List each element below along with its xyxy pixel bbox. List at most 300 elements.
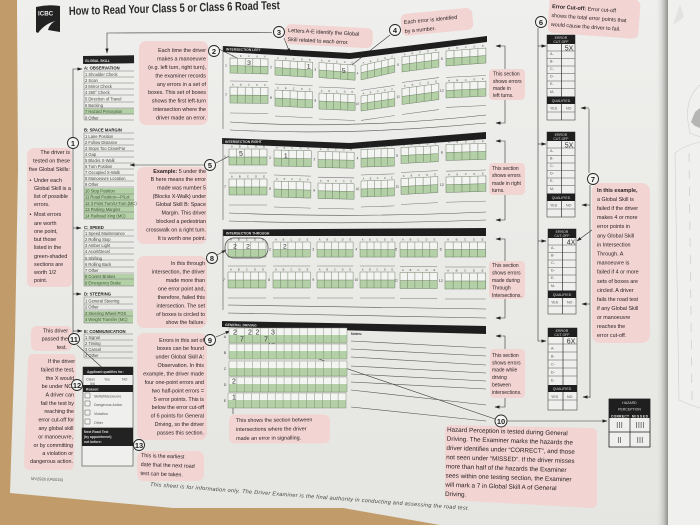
panel: error cut-off form left turns: M-: [550, 90, 555, 94]
callout 7: global skill failure: error points in: [597, 224, 630, 230]
callout: signalling section: intersections where the driver: [236, 426, 307, 433]
callout 7: global skill failure: fails the road test: [597, 297, 639, 303]
panel: error cut-off form general driving: A-: [551, 346, 555, 350]
error box row 1: 6: [441, 151, 443, 155]
side note: left turns: left turns.: [493, 93, 514, 99]
section E communication: 3 Cancel: [85, 347, 101, 352]
side note: through intersections: This section: [492, 263, 519, 269]
callout 7: global skill failure: in Intersection: [597, 242, 631, 248]
callout 2: set of boxes: any errors in a set of: [157, 82, 206, 88]
error box row 1: A B C D E: [403, 141, 437, 147]
callout 13: next test date: date that the next road: [141, 462, 195, 470]
panel: error cut-off form general driving: CUT-OFF: [554, 333, 570, 337]
connector lines and arrows: [73, 28, 607, 452]
callout 1: global skills: Global Skill is a: [34, 186, 71, 192]
error box row 2: A B C D E: [447, 269, 484, 272]
error box row 1: A B C D E: [277, 57, 311, 62]
callout 1: global skills: [27, 148, 72, 287]
number badges: [68, 16, 598, 450]
callout 7: global skill failure: Through. A: [597, 252, 624, 258]
number badges: 7: [591, 175, 595, 184]
callout 5: example: It is worth one point.: [158, 236, 206, 242]
callout 1: global skills: one point,: [34, 229, 58, 235]
callout 10: hazard perception: will mark a 7 in Global Skill A of General: [444, 482, 557, 492]
error box row 2: A B C D E: [230, 268, 264, 272]
section B space margin: B: SPACE MARGIN: [84, 128, 122, 132]
side note: through intersections: Intersections.: [492, 293, 522, 299]
callout 8: failed intersection: made more than: [166, 278, 205, 284]
callout 5: example: blocked a pedestrian: [156, 219, 206, 225]
section D steering: D: STEERING: [84, 292, 111, 296]
callout 1: global skills: The driver is: [40, 150, 70, 156]
callout: signalling section: This shows the section between: [236, 417, 312, 424]
error box row 1: 2: [233, 244, 237, 251]
panel: error cut-off form right turns: E-: [550, 179, 554, 183]
section B space margin: 9 Other: [85, 182, 99, 187]
section B space margin: 3 Stops Too Close/Far: [85, 146, 126, 151]
section E communication: [84, 329, 133, 358]
error box row 2: A B C D E: [277, 86, 311, 91]
callout 9: skill A errors: Errors in this set of: [159, 338, 205, 344]
callout 9: skill A errors: Observation. In this: [158, 363, 204, 369]
callout 11: passed: [31, 326, 72, 351]
number badges: 5: [208, 161, 212, 170]
panel: error cut-off form left turns: ERROR: [555, 36, 568, 40]
callout 8: failed intersection: intersection. The set: [157, 304, 205, 310]
side note: right turns: made in right: [492, 181, 522, 187]
general driving grid: 2: [248, 330, 252, 336]
callout 11: passed: test.: [57, 345, 67, 351]
error box row 2: 7: [224, 185, 226, 189]
error box row 2: A B C D E: [362, 268, 393, 272]
panel: applicant qualifies form: NO: [122, 378, 128, 382]
callout 10: hazard perception: Driving. The Examiner marks the hazards the: [447, 436, 574, 447]
band header: INTERSECTION LEFT: [226, 48, 262, 52]
band header: [223, 36, 487, 59]
side note: right turns: This section: [492, 166, 519, 172]
error box row 2: 11: [395, 185, 399, 189]
error box row 1: 5: [342, 68, 346, 75]
section C speed: 4 Accel/Decel: [85, 249, 110, 254]
callout 9: skill A errors: of 6 points for General: [151, 414, 204, 420]
error box row 1: 2: [270, 65, 272, 69]
panel: intersection right: [222, 132, 486, 223]
panel: error cut-off form right turns: D-: [550, 172, 555, 176]
callout 12: failing the test: [24, 354, 76, 470]
callout 8: failed intersection: therefore, failed this: [158, 295, 205, 301]
callout 1: global skills: worth 1/2: [33, 270, 56, 276]
panel: error cut-off form general driving: D-: [551, 370, 556, 374]
callout 8: failed intersection: [137, 256, 207, 328]
panel: error cut-off form left turns: QUALIFIED: [552, 99, 571, 103]
right facing page: [656, 0, 700, 525]
panel: error cut-off form general driving: NO: [567, 395, 573, 399]
panel: error cut-off form through: NO: [567, 300, 573, 304]
callout 7: global skill failure: manoeuvre is: [597, 260, 630, 266]
error box row 2: 9: [312, 278, 314, 282]
callout 7: global skill failure: a Global Skill is: [597, 197, 634, 203]
section B space margin: 6 Turn Position: [85, 164, 113, 169]
general driving grid: 1: [232, 394, 236, 402]
panel: error cut-off form right turns: B-: [550, 156, 554, 160]
error box row 1: A B C D E: [448, 44, 484, 50]
side note: left turns: This section: [493, 72, 520, 78]
callout 9: skill A errors: passes this section.: [157, 430, 204, 436]
callout 9: skill A errors: example, the driver made: [143, 372, 204, 378]
callout: signalling section: [229, 414, 330, 444]
error box row 2: A B C D E: [232, 83, 266, 87]
callout 12: failing the test: error cut-off for: [38, 418, 74, 424]
general driving grid: 7: [264, 336, 268, 344]
error box row 2: 10: [356, 102, 359, 106]
section B space margin: 8 Manoeuvre Location: [85, 176, 126, 181]
panel: error cut-off form general driving: [548, 328, 577, 410]
error box row 1: 4: [357, 71, 359, 76]
callout 10: hazard perception: [444, 425, 597, 508]
panel: error cut-off form left turns: [547, 35, 575, 120]
callout 12: failing the test: dangerous action.: [30, 459, 73, 465]
number badges: 8: [210, 254, 214, 263]
error box row 1: 5: [396, 154, 398, 158]
panel: applicant qualifies form: Violation: [94, 412, 108, 416]
error box row 1: [225, 44, 486, 81]
panel: error cut-off form right turns: YES: [550, 204, 558, 208]
panel: applicant qualifies form: 5/6: [90, 382, 95, 386]
callout 2: set of boxes: shows the first left-turn: [152, 98, 206, 104]
panel: error cut-off form through: M-: [551, 284, 556, 288]
callout 10: hazard perception: sees within one testing section, the Examiner: [445, 472, 572, 483]
callout 1: global skills: Under each: [34, 178, 62, 184]
callout 2: set of boxes: Each time the driver: [158, 48, 206, 54]
callout 10: hazard perception: not seen under “MISSED”. If the driver misses: [446, 454, 575, 465]
section E communication: 2 Timing: [85, 341, 101, 346]
side note: between intersections: made while: [492, 368, 518, 374]
error box row 1: 6: [440, 248, 442, 251]
panel: error cut-off form left turns: C-: [550, 67, 555, 71]
section D steering: 4 Weight Transfer (MC): [85, 317, 128, 322]
section C speed: 8 Covers Brakes: [85, 274, 115, 279]
panel: error cut-off form general driving: QUALIFIED: [553, 387, 572, 391]
panel: error cut-off form right turns: NO: [566, 204, 572, 208]
band header: INTERSECTION RIGHT: [225, 140, 263, 144]
error box row 1: 1: [224, 155, 226, 159]
side note: through intersections: [489, 261, 525, 299]
error box row 2: 7: [223, 278, 225, 282]
section C speed: 3 Amber Light: [85, 243, 111, 248]
number badges: 13: [135, 441, 143, 450]
callout 12: failing the test: failed the test,: [41, 368, 75, 374]
error box row 1: 3: [313, 157, 315, 161]
side note: between intersections: [490, 349, 525, 398]
callout 12: failing the test: or by committing: [33, 443, 73, 449]
panel: hazard perception tally: MISSED: [632, 414, 649, 418]
section A observation: 8 Other: [85, 116, 99, 120]
panel: error cut-off form general driving: E-: [551, 378, 555, 382]
panel: error cut-off form through: CUT-OFF: [554, 234, 570, 238]
callout 5: example: (Blocks X-Walk) under: [153, 194, 206, 200]
number badges: 1: [71, 139, 75, 148]
failed intersection circle: [225, 238, 268, 258]
callout 7: global skill failure: In this example,: [597, 188, 638, 194]
callout 1: global skills: list of possible: [34, 194, 68, 200]
error box row 1: [224, 139, 486, 168]
error box row 1: 1: [284, 153, 288, 160]
panel: error cut-off form right turns: C-: [550, 164, 555, 168]
error box row 2: A B C D E: [404, 79, 437, 88]
panel: error cut-off form right turns: ERROR: [555, 133, 568, 137]
callout 7: global skill failure: failed if 4 or more: [597, 270, 639, 276]
callout 10: hazard perception: more than half of the hazards the Examiner: [446, 463, 567, 474]
error box row 2: 8: [269, 187, 271, 191]
callout 7: global skill failure: or manoeuvre: [597, 315, 630, 321]
callout 9: skill A errors: two half-point errors =: [152, 388, 204, 394]
error box row 1: A B C D E: [231, 144, 265, 148]
error box row 1: A B C D E: [363, 143, 393, 149]
error box row 1: 3: [314, 68, 316, 72]
panel: error cut-off form right turns: QUALIFIED: [552, 196, 571, 200]
callout 9: skill A errors: 5 error points. This is: [154, 397, 204, 403]
panel: error cut-off form right turns: [547, 132, 575, 217]
panel: error cut-off form left turns: B-: [550, 60, 554, 64]
error box row 1: A B C D E: [320, 148, 353, 152]
panel: error cut-off form through: A-: [551, 246, 555, 250]
callout 7: global skill failure: makes 4 or more: [597, 215, 637, 221]
callout 12: failing the test: or manoeuvre,: [38, 434, 73, 440]
panel: error cut-off form through: D-: [551, 268, 556, 272]
panel: error cut-off form through: ERROR: [556, 230, 569, 234]
callout 9: skill A errors: four one-point errors and: [145, 380, 204, 386]
section B space margin: 14 Railroad Xing (MC): [85, 214, 126, 218]
callout 7: global skill failure: if any Global Skill: [597, 306, 638, 312]
section B space margin: 11 Road Position—P/Lot: [85, 194, 130, 200]
callout 6: error cut-off: Error Cut-off: Error cut-off: [552, 4, 616, 14]
number badges: 3: [277, 28, 281, 37]
callout 5: example: B here means the error: [151, 177, 206, 183]
callout 2: set of boxes: driver made an error.: [156, 116, 206, 122]
error box row 2: [223, 266, 486, 299]
callout 12: failing the test: fail the test by: [41, 401, 74, 407]
section C speed: 6 Rolling Back: [85, 262, 112, 267]
callout 7: global skill failure: reaches the: [597, 324, 625, 330]
side note: between intersections: driving: [492, 375, 507, 381]
error box row 2: 8: [270, 96, 272, 100]
number badges: 6: [539, 18, 543, 27]
callout 3: letters: [284, 24, 373, 48]
panel: next road test form: Next Road Test: [84, 430, 109, 434]
callout 5: example: [137, 167, 207, 244]
general driving grid: 2: [256, 330, 260, 336]
error box row 2: A B C D E: [321, 90, 354, 94]
panel: error cut-off form general driving: 6X: [567, 338, 576, 346]
callout 1: global skills: are worth: [34, 221, 56, 227]
error box row 1: 4: [355, 247, 357, 251]
callout 2: set of boxes: intersection where the: [153, 107, 206, 113]
error box row 1: [228, 238, 486, 257]
panel: error cut-off form through: QUALIFIED: [553, 293, 572, 297]
form number: MV2926 (042016): [31, 476, 64, 482]
error box row 1: A B C D E: [448, 139, 484, 144]
error box row 1: A B C D E: [404, 49, 437, 56]
side note: between intersections: between: [492, 382, 511, 388]
error box row 2: 8: [268, 278, 270, 282]
callout 13: next test date: [137, 451, 204, 481]
panel: intersection left: [223, 36, 487, 132]
callout 3: letters: Skill related to each error.: [287, 37, 349, 46]
callout 6: error cut-off: [547, 0, 641, 39]
section B space margin: 12 3 Point Turn/U-Turn (MC): [85, 201, 137, 206]
error box row 2: 10: [354, 278, 358, 282]
panel: error cut-off form left turns: CUT-OFF: [553, 40, 569, 44]
callout 8: failed intersection: of boxes is circled to: [156, 312, 205, 318]
section A observation: 5 Direction of Travel: [85, 96, 121, 102]
number badges: 9: [208, 336, 212, 345]
callout 7: global skill failure: any Global Skill: [597, 234, 634, 240]
panel: hazard perception tally: HAZARD: [622, 401, 637, 405]
callout 9: skill A errors: below the error cut-off: [152, 405, 204, 411]
panel: hazard perception tally: III: [637, 436, 643, 445]
callout 7: global skill failure: failed if the driver: [597, 206, 638, 212]
error box row 1: A B C D E: [275, 239, 309, 242]
general driving grid: E: [224, 399, 227, 403]
section A observation: 1 Shoulder Check: [85, 72, 118, 77]
footer disclaimer: This sheet is for information only. The Driver Examiner is the final authority in conducting and assessing the road test.: [150, 482, 469, 512]
side note: left turns: shows errors: [493, 79, 522, 85]
error box row 1: 5: [397, 63, 399, 67]
section C speed: 5 Shifting: [85, 256, 103, 261]
panel: applicant qualifies form: Skills/Manoeuvre: [94, 394, 121, 398]
section C speed: 1 Speed Maintenance: [85, 231, 126, 236]
callout 6: error cut-off: shows the total error points that: [551, 13, 627, 24]
panel: hazard perception tally: PERCEPTION: [618, 408, 641, 412]
error box row 2: 12: [439, 279, 443, 283]
callout 2: set of boxes: boxes. This set of boxes: [148, 90, 206, 96]
icon: ICBC logo: [36, 5, 60, 33]
section B space margin: 4 Gap: [85, 152, 97, 157]
error box row 2: 12: [440, 183, 444, 187]
error box row 1: A B C D E: [230, 239, 264, 242]
panel: global skill list: [83, 55, 137, 358]
section C speed: 7 Other: [85, 268, 99, 273]
callout 1: global skills: sections are: [34, 262, 63, 268]
section C speed: 9 Emergency Brake: [85, 280, 122, 286]
header: global skill: [83, 55, 134, 64]
icon: ICBC logo: ICBC: [38, 10, 54, 18]
error box row 2: [225, 75, 486, 121]
panel: next road test form: not before:: [84, 440, 102, 444]
error box row 1: 2: [246, 244, 250, 251]
error box row 1: 2: [269, 156, 271, 160]
callout 10: hazard perception: Hazard Perception is tested during General: [447, 427, 568, 437]
section C speed: 2 Rolling Stop: [85, 237, 111, 242]
error box row 2: 10: [356, 187, 359, 191]
side note: between intersections: This section: [492, 353, 519, 359]
panel: error cut-off form left turns: D-: [550, 74, 555, 78]
callout 2: set of boxes: the examiner records: [155, 74, 206, 80]
panel: error cut-off form through: YES: [551, 300, 559, 304]
panel: error cut-off form right turns: 5X: [565, 142, 574, 150]
panel: error cut-off form left turns: YES: [550, 106, 558, 110]
notes lines: Notes:: [351, 332, 362, 336]
callout 8: failed intersection: one error point and,: [158, 286, 205, 292]
side note: through intersections: shows errors: [492, 270, 521, 276]
panel: error cut-off form through: B-: [551, 254, 555, 258]
panel: error cut-off form through: 4X: [567, 240, 576, 246]
side note: left turns: made in: [493, 86, 511, 92]
callout 9: skill A errors: boxes can be found: [157, 346, 204, 352]
section A observation: [84, 66, 134, 120]
band header: [222, 321, 486, 334]
callout 12: failing the test: reaching the: [44, 409, 74, 415]
error box row 1: A B C D E: [319, 239, 352, 242]
section B space margin: 7 Occupied X-Walk: [85, 170, 121, 175]
panel: error cut-off form through: [548, 229, 576, 314]
panel: intersection through: [223, 228, 486, 318]
section B space margin: 10 Stop Position: [85, 188, 116, 194]
error box row 1: 2: [269, 248, 271, 251]
panel: applicant qualifies form: Applicant qualifies for:: [87, 370, 124, 374]
callout 1: global skills: but those: [34, 237, 56, 243]
panel: error cut-off form left turns: A-: [550, 52, 554, 56]
callout 5: example: made was number 5: [157, 186, 206, 192]
panel: general driving: [222, 321, 486, 421]
section A observation: 7 Hazard Perception: [85, 109, 123, 114]
callout 12: failing the test: A driver can: [46, 392, 74, 398]
band header: INTERSECTION THROUGH: [226, 232, 270, 236]
panel: error cut-off form general driving: ERROR: [556, 329, 569, 333]
panel: applicant qualifies form: [83, 367, 133, 428]
error box row 1: A B C D E: [321, 59, 354, 65]
panel: error cut-off form through: E-: [551, 276, 555, 280]
general driving grid: A: [224, 335, 227, 339]
callout 8: failed intersection: intersection, the driver: [152, 270, 205, 276]
error box row 2: A B C D E: [276, 177, 309, 182]
callout 10: hazard perception: driver identifies under “CORRECT”, and those: [446, 445, 575, 456]
callout 3: letters: Letters A-E identify the Global: [288, 28, 359, 38]
callout 2: set of boxes: [139, 41, 208, 125]
error box row 1: A B C D E: [276, 146, 310, 150]
callout 2: set of boxes: (e.g. left turn, right turn),: [148, 65, 206, 71]
section B space margin: 13 Parking Margins: [85, 207, 120, 212]
error box row 2: A B C D E: [402, 268, 436, 272]
band header: [223, 228, 486, 236]
side note: between intersections: intersections.: [492, 390, 521, 396]
error box row 1: A B C D E: [232, 55, 266, 59]
panel: error cut-off form right turns: A-: [550, 149, 554, 153]
callout 2: set of boxes: makes a manoeuvre: [157, 56, 206, 62]
band header: [222, 132, 486, 149]
band header: GENERAL DRIVING: [225, 323, 257, 328]
general driving grid: B: [224, 351, 227, 355]
general driving grid: 2: [233, 330, 237, 336]
general driving grid: 7: [240, 336, 244, 344]
general driving grid: [224, 328, 347, 408]
error box row 2: A B C D E: [275, 267, 309, 272]
callout 7: global skill failure: error cut-off.: [597, 333, 626, 339]
panel: error cut-off form general driving: B-: [551, 354, 555, 358]
panel: applicant qualifies form: Other: [94, 421, 104, 425]
panel: error cut-off form general driving: C-: [551, 362, 556, 366]
callout 4: numbers: by a number.: [404, 26, 436, 35]
section E communication: 4 Other: [85, 353, 99, 358]
callout 12: failing the test: If the driver: [48, 359, 75, 365]
error box row 2: A B C D E: [319, 268, 352, 272]
error box row 1: 5: [239, 151, 243, 158]
panel: applicant qualifies form: Yes: [104, 378, 110, 382]
callout 9: skill A errors: Driving, so the driver: [155, 422, 204, 428]
callout 1: global skills: errors.: [34, 202, 50, 208]
header: global skill: GLOBAL SKILL: [85, 59, 110, 63]
error box row 2: 9: [313, 189, 315, 193]
